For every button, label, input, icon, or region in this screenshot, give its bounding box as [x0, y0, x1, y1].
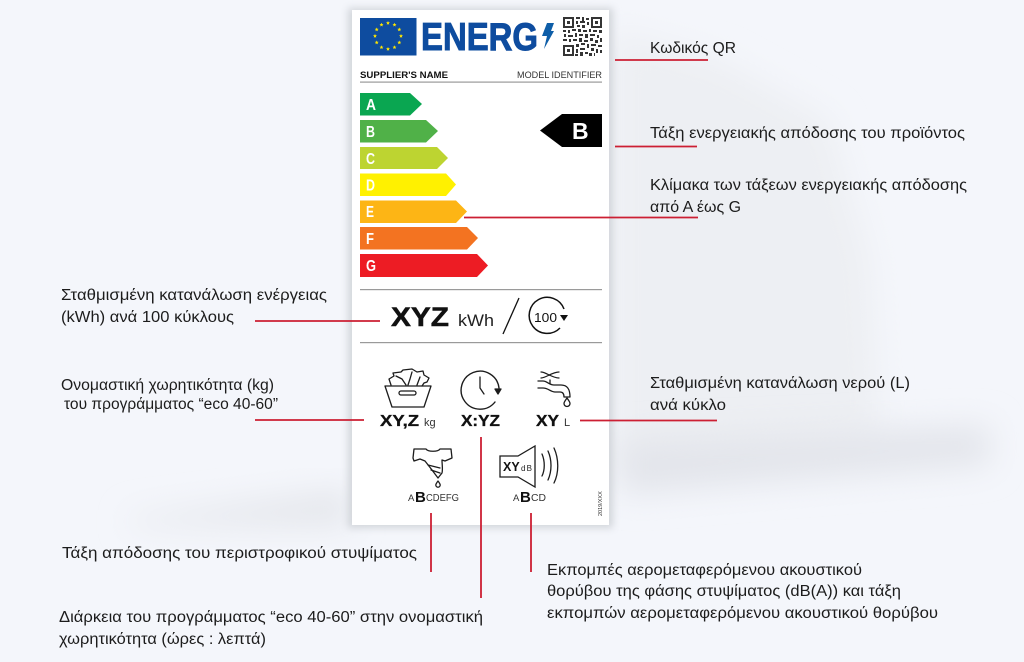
icon: EU flag: [360, 18, 416, 56]
callout: weighted energy consumption: (kWh) ανά 100 κύκλους: [61, 309, 234, 326]
energy consumption value: XYZ: [391, 302, 449, 332]
noise class scale: [513, 489, 546, 506]
energy class scale A to G: [360, 93, 488, 277]
panel: energy label: [352, 10, 609, 525]
class B arrow: [360, 120, 438, 142]
water value: [536, 413, 570, 430]
callout: energy class scale: [464, 177, 967, 218]
icon: 100 cycles: [529, 297, 568, 333]
noise class scale: A: [513, 493, 520, 504]
icon: 100 cycles: 100: [534, 310, 557, 325]
icon: water tap: [538, 372, 570, 406]
callout: programme duration: χωρητικότητα (ώρες : λεπτά): [59, 631, 266, 648]
heading: ENERG: ENERG: [421, 16, 538, 59]
callout: airborne noise: Εκπομπές αερομεταφερόμενου ακουστικού: [547, 562, 862, 579]
callout: spin drying class: Τάξη απόδοσης του περιστροφικού στυψίματος: [62, 545, 417, 562]
duration value: X:YZ: [461, 413, 501, 430]
class G arrow: [360, 254, 488, 277]
noise class scale: CD: [531, 493, 546, 504]
callout: energy class scale: Κλίμακα των τάξεων ενεργειακής απόδοσης: [650, 177, 967, 194]
class C arrow: [360, 147, 448, 169]
water value: L: [564, 417, 570, 429]
callout: airborne noise: [531, 513, 938, 622]
noise class scale: B: [520, 489, 531, 506]
callout: programme duration: [59, 437, 483, 648]
icon: noise speaker: [500, 446, 558, 487]
class A arrow: [360, 93, 422, 116]
class D arrow: D: [366, 178, 375, 194]
callout: rated capacity: Ονομαστική χωρητικότητα (kg): [61, 377, 274, 394]
class G arrow: G: [366, 258, 376, 275]
model identifier: MODEL IDENTIFIER: [517, 70, 602, 80]
callout: weighted water consumption: ανά κύκλο: [650, 397, 726, 414]
callout: airborne noise: εκπομπών αερομεταφερόμενου ακουστικού θορύβου: [547, 605, 938, 622]
callout: airborne noise: θορύβου της φάσης στυψίματος (dB(A)) και τάξη: [547, 583, 901, 600]
icon: noise speaker: dB: [521, 464, 532, 473]
icon: clock: [461, 371, 501, 409]
class D arrow: [360, 174, 456, 196]
energy consumption value: [391, 298, 519, 334]
icon: QR code: [563, 17, 602, 56]
energy consumption value: kWh: [458, 311, 494, 330]
callout: QR code: [615, 40, 736, 60]
capacity value: kg: [424, 417, 436, 429]
class E arrow: E: [366, 204, 374, 221]
supplier's name: SUPPLIER'S NAME: [360, 70, 448, 80]
spin class scale: B: [415, 489, 426, 506]
callout: energy class scale: από Α έως G: [650, 199, 741, 216]
capacity value: [380, 413, 436, 430]
callout: rated capacity: [61, 377, 364, 420]
class F arrow: F: [366, 231, 374, 248]
icon: energy bolt: [542, 23, 554, 49]
class F arrow: [360, 227, 478, 250]
callout: product energy class: Τάξη ενεργειακής απόδοσης του προϊόντος: [650, 125, 965, 142]
class C arrow: C: [366, 151, 375, 168]
class B arrow: B: [366, 124, 375, 141]
icon: laundry basket: [385, 369, 431, 407]
capacity value: XY,Z: [380, 413, 420, 430]
callout: rated capacity: του προγράμματος “eco 40-60”: [64, 396, 278, 413]
callout: weighted energy consumption: [61, 287, 380, 326]
callout: weighted water consumption: [580, 375, 910, 420]
callout: weighted energy consumption: Σταθμισμένη κατανάλωση ενέργειας: [61, 287, 327, 304]
spin class scale: CDEFG: [426, 493, 459, 504]
spin class scale: [408, 489, 459, 506]
water value: XY: [536, 413, 560, 430]
callout: weighted water consumption: Σταθμισμένη κατανάλωση νερού (L): [650, 375, 910, 392]
regulation code: 2019/XXX: [598, 491, 604, 516]
product class marker B: B: [572, 118, 589, 144]
callout: programme duration: Διάρκεια του προγράμματος “eco 40-60” στην ονομαστική: [59, 609, 483, 626]
class A arrow: A: [366, 97, 376, 114]
icon: spin drying shirt: [413, 449, 452, 487]
icon: noise speaker: XY: [503, 460, 520, 474]
spin class scale: A: [408, 493, 415, 504]
product class marker B: [540, 114, 602, 147]
callout: QR code: Κωδικός QR: [650, 40, 736, 57]
class E arrow: [360, 200, 467, 223]
